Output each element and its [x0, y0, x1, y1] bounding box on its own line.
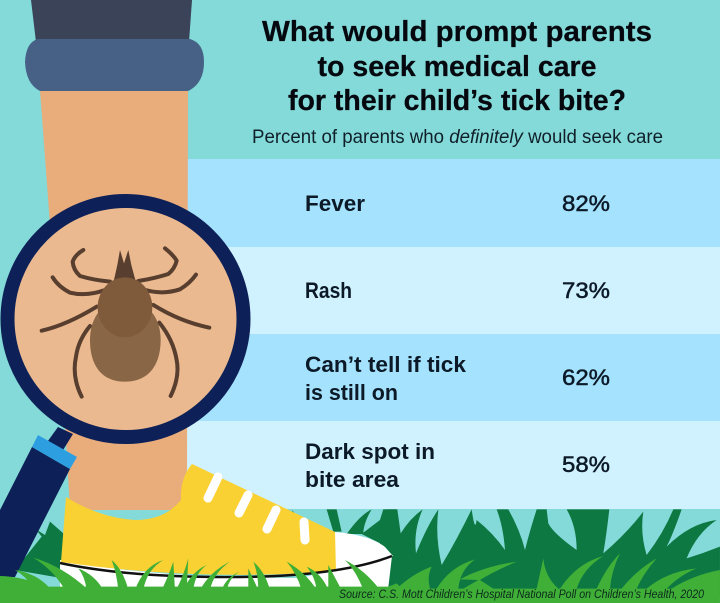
- row: fever: [305, 191, 610, 216]
- trouser leg: [31, 0, 192, 42]
- row: can't tell if tick is still on: 62%: [562, 365, 610, 390]
- icon: tick: [42, 248, 209, 397]
- shoe body: [61, 464, 336, 575]
- shoe toe cap: [335, 532, 393, 572]
- shoe outline stripe: [60, 556, 392, 577]
- handle band: [32, 435, 77, 469]
- row: rash: [305, 278, 610, 303]
- row: can't tell if tick is still on: Can’t tell if tick: [305, 352, 467, 377]
- dark grass behind, middle: [292, 509, 400, 587]
- shoe sole: [60, 556, 392, 590]
- tick mouthparts: [114, 250, 135, 280]
- tick legs: [42, 248, 209, 397]
- leg: [40, 90, 188, 510]
- dark grass behind, left: [15, 522, 63, 578]
- light grass foreground, right: [380, 553, 720, 603]
- row: dark spot in bite area: bite area: [305, 467, 400, 492]
- table rows background: [180, 159, 720, 509]
- handle: [0, 447, 70, 577]
- row: dark spot in bite area: Dark spot in: [305, 439, 435, 464]
- rolled trouser cuff: [25, 39, 204, 91]
- row: rash: 73%: [562, 278, 610, 303]
- row: fever: 82%: [562, 191, 610, 216]
- title: for their child’s tick bite?: [288, 85, 626, 117]
- title: to seek medical care: [318, 51, 596, 83]
- dark grass behind, right: [380, 509, 720, 597]
- row: fever: Fever: [305, 191, 365, 216]
- subtitle: Percent of parents who definitely would seek care: [252, 127, 663, 148]
- tick shield: [98, 277, 152, 337]
- handle neck: [45, 427, 73, 455]
- light grass foreground: [0, 558, 420, 603]
- shoe: [60, 464, 393, 590]
- title: What would prompt parents: [262, 16, 652, 48]
- row: rash: Rash: [305, 278, 352, 303]
- row: dark spot in bite area: [305, 439, 610, 492]
- row: can't tell if tick is still on: [305, 352, 610, 405]
- magnifying glass: [0, 201, 244, 577]
- lens: [8, 201, 244, 437]
- shoe laces: [208, 477, 305, 540]
- row: dark spot in bite area: 58%: [562, 452, 610, 477]
- row: can't tell if tick is still on: is still on: [305, 380, 398, 405]
- tick abdomen: [90, 300, 161, 382]
- title: [262, 16, 652, 117]
